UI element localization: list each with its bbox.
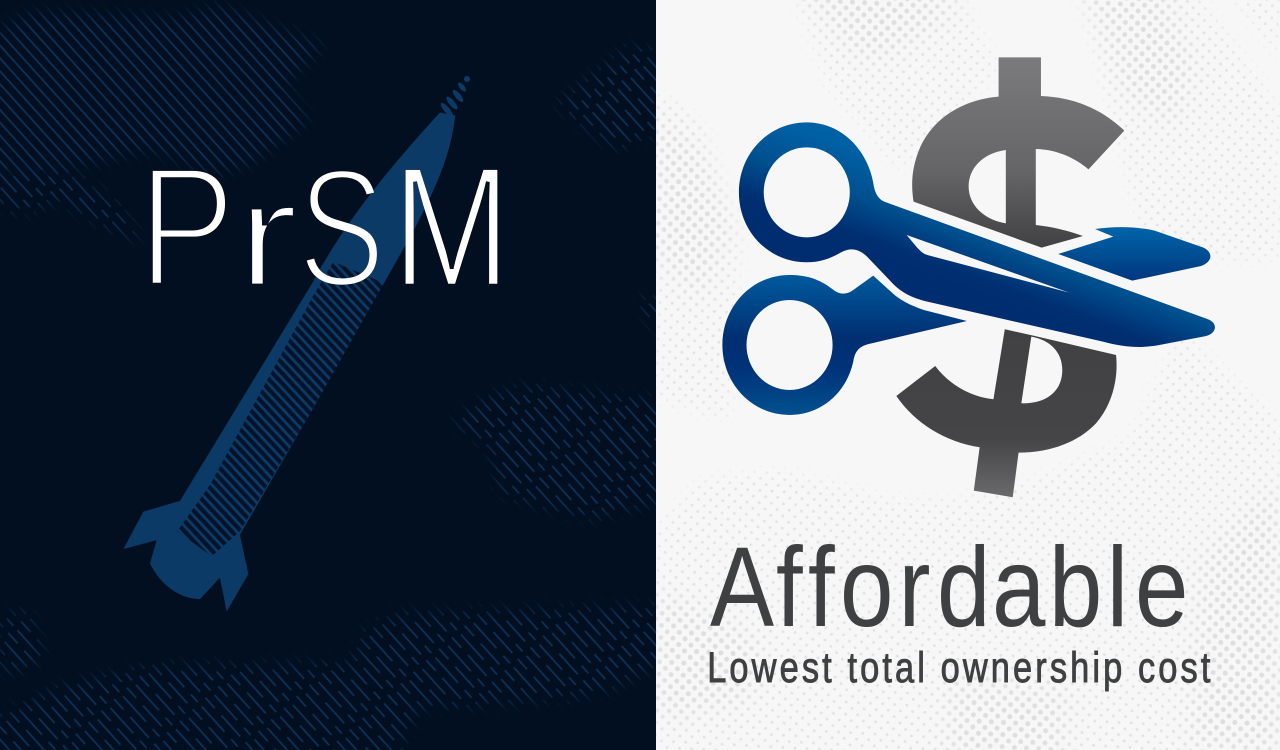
title: PrSM: M xyxy=(392,131,511,323)
panel: PrSM navy background xyxy=(0,0,656,750)
title: PrSM: S xyxy=(298,133,385,322)
title: PrSM: P xyxy=(138,131,236,323)
heading: Affordable: Affordable xyxy=(710,525,1188,651)
subheading: Lowest total ownership cost: Lowest total ownership cost xyxy=(707,644,1211,692)
scissors: upper handle and long blade xyxy=(739,122,1215,347)
title: PrSM xyxy=(138,131,511,323)
scissors: lower handle and blade xyxy=(722,275,967,415)
scissors: short blade tip xyxy=(1058,227,1210,281)
dollar sign: bottom half xyxy=(896,329,1117,497)
dollar sign: top half xyxy=(912,57,1124,248)
panel: Affordable light background xyxy=(656,0,1280,750)
rocket silhouette xyxy=(123,76,470,612)
title: PrSM: r xyxy=(236,152,299,318)
icon: scissors cutting dollar sign xyxy=(722,57,1215,497)
